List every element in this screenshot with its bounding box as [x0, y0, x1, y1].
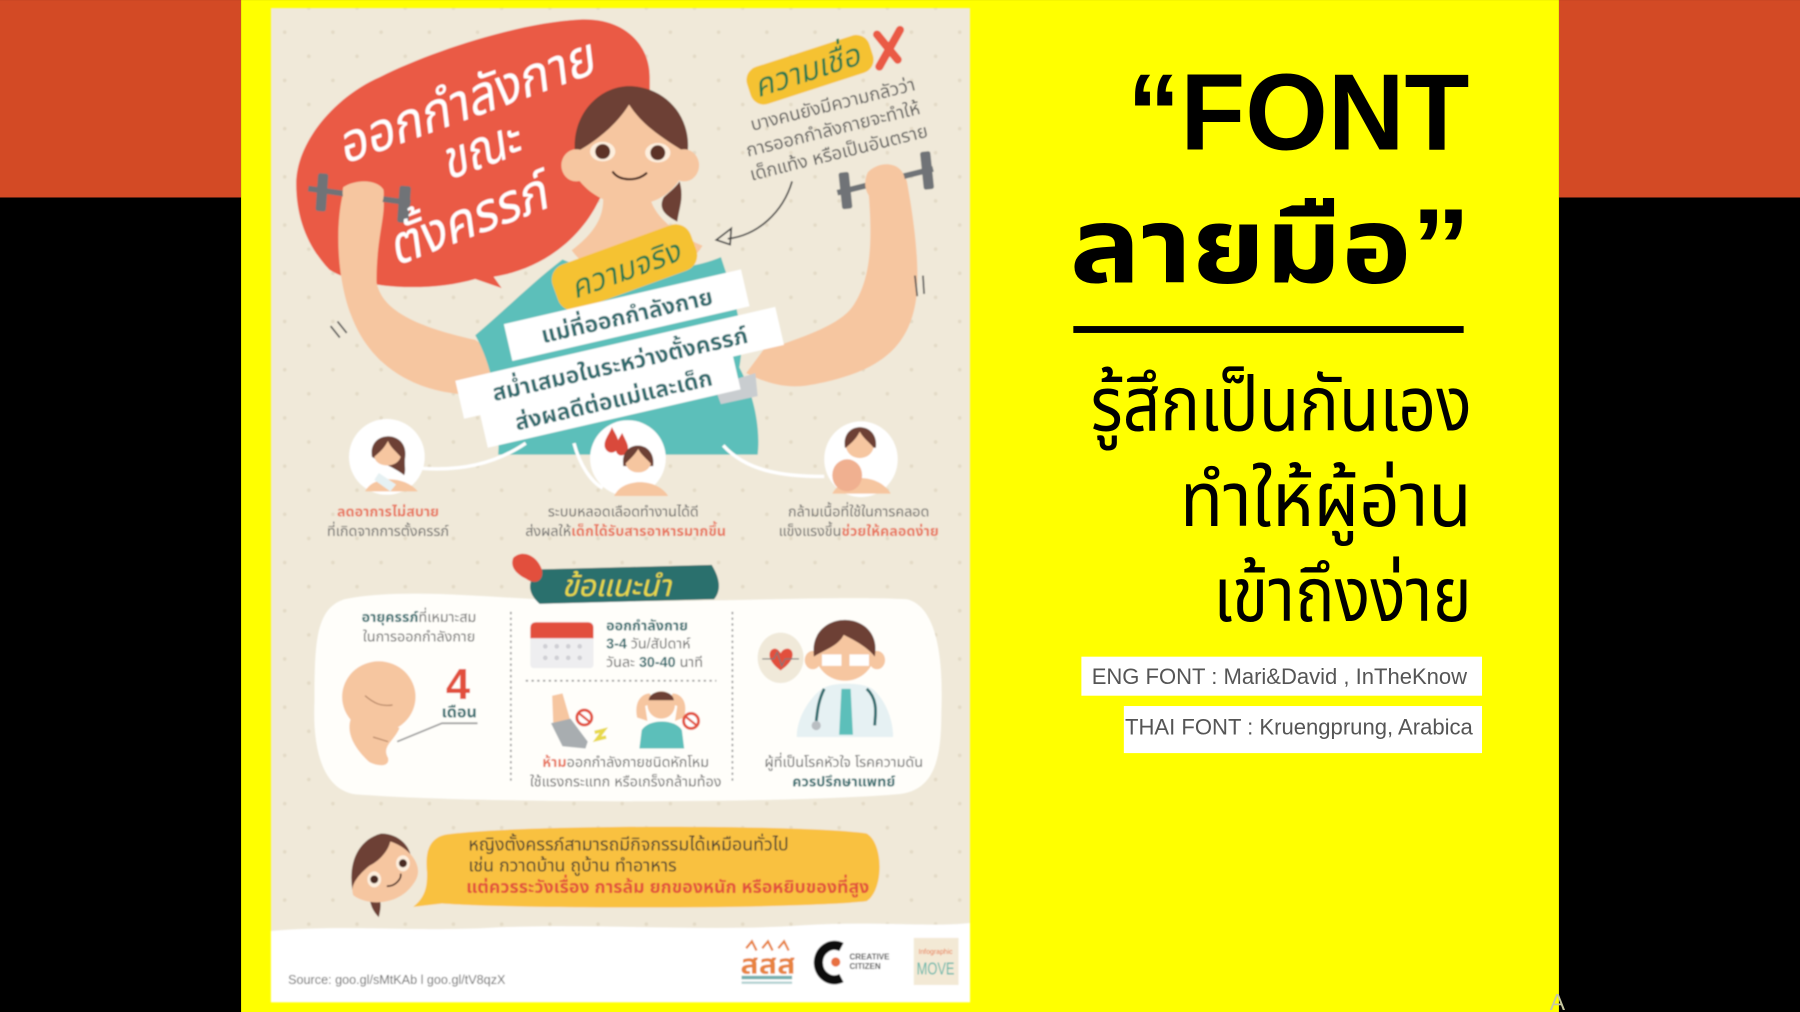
- myth text: บางคนยังมีความกลัวว่า: [748, 74, 917, 135]
- logo: creative citizen: [818, 945, 890, 980]
- doctor text: [764, 752, 923, 790]
- advice panel: [314, 594, 942, 801]
- poster background: [271, 8, 970, 1002]
- left dumbbell: [308, 173, 411, 223]
- benefit caption 3: [779, 502, 939, 540]
- subheading text: รู้สึกเป็นกันเอง: [1091, 363, 1472, 451]
- callout: 4 months: 4: [446, 661, 471, 709]
- icon: fetus: [342, 661, 416, 765]
- english font note: ENG FONT : Mari&David , InTheKnow: [1092, 664, 1467, 689]
- title speech bubble: [296, 19, 650, 288]
- logo: infographic move: [914, 938, 959, 985]
- logo: sss: [740, 941, 796, 984]
- heading: FONT: “FONT: [1127, 51, 1469, 173]
- right fist: [865, 164, 905, 205]
- frequency text: ออกกำลังกาย: [606, 618, 688, 634]
- ponytail: [662, 181, 682, 222]
- callout: 4 months: [397, 661, 478, 742]
- advice banner: ข้อแนะนำ: [562, 570, 673, 603]
- red band left: [0, 0, 241, 197]
- gestational age text: ในการออกกำลังกาย: [363, 630, 475, 646]
- thai font note: [1124, 706, 1482, 753]
- bubble text: [466, 834, 869, 898]
- ribbon 1: แม่ที่ออกกำลังกาย: [538, 280, 715, 348]
- icon: heart bubble: [758, 633, 804, 683]
- logo: sss: สสส: [740, 949, 796, 980]
- heading: Thai title: ลายมือ”: [1070, 187, 1471, 305]
- neck: [572, 193, 703, 277]
- icon: pin: [512, 554, 542, 582]
- advice banner: [512, 554, 719, 604]
- myth text: การออกกำลังกายจะทำให้: [744, 97, 922, 161]
- no exercise text: ใช้แรงกระแทก หรือเกร็งกล้ามท้อง: [530, 774, 721, 790]
- title text: ขณะ: [432, 107, 531, 192]
- icon: red X: [877, 30, 900, 67]
- yellow speech bubble: [413, 827, 880, 908]
- bubble text: หญิงตั้งครรภ์สามารถมีกิจกรรมได้เหมือนทั่วไป: [468, 834, 789, 855]
- logo: infographic move: MOVE: [917, 959, 955, 979]
- logo: creative citizen: CREATIVE: [849, 953, 890, 962]
- icon: doctor: [797, 620, 893, 737]
- motion marks: [331, 276, 924, 338]
- woman face: [351, 833, 418, 917]
- benefit caption 3: แข็งแรงขึ้นช่วยให้คลอดง่าย: [779, 521, 939, 540]
- logo: creative citizen: CITIZEN: [849, 962, 881, 971]
- divider: [1073, 326, 1464, 333]
- title text: ออกกำลังกาย: [328, 27, 605, 176]
- frequency text: 3-4 วัน/สัปดาห์: [606, 637, 691, 653]
- benefit caption 3: กล้ามเนื้อที่ใช้ในการคลอด: [788, 502, 929, 521]
- arrow: myth to fact: [716, 181, 792, 245]
- logo: infographic move: Infographic: [919, 949, 953, 956]
- benefit caption 2: ระบบหลอดเลือดทำงานได้ดี: [548, 505, 699, 521]
- dotted dividers: [511, 612, 732, 784]
- fact label: ความจริง: [566, 233, 686, 305]
- no exercise text: ห้ามออกกำลังกายชนิดหักโหม: [542, 755, 709, 771]
- yellow panel: [241, 0, 1559, 1012]
- shirt: [475, 257, 758, 455]
- bubble text: เช่น กวาดบ้าน ถูบ้าน ทำอาหาร: [468, 855, 677, 877]
- subheading text: เข้าถึงง่าย: [1213, 553, 1472, 638]
- ribbon 1: [504, 269, 749, 361]
- subheading text: [1091, 363, 1472, 638]
- ears: [561, 149, 591, 181]
- benefit caption 2: ส่งผลให้เด็กได้รับสารอาหารมากขึ้น: [525, 521, 726, 540]
- ribbon fold: [714, 373, 758, 404]
- thai font note: THAI FONT : Kruengprung, Arabica: [1125, 715, 1474, 740]
- benefit caption 1: [327, 504, 449, 540]
- myth text: เด็กแท้ง หรือเป็นอันตราย: [748, 120, 930, 185]
- right arm: [746, 167, 917, 386]
- bubble text: แต่ควรระวังเรื่อง การล้ม ยกของหนัก หรือหยิบของที่สูง: [466, 874, 869, 898]
- no exercise text: [530, 755, 721, 790]
- myth label: ความเชื่อ: [748, 33, 865, 104]
- frequency text: [606, 618, 703, 671]
- figure: arms: [338, 167, 917, 395]
- smile: [613, 172, 646, 179]
- icon: woman with no sign: [636, 691, 699, 749]
- source: Source: goo.gl/sMtKAb l goo.gl/tV8qzX: [288, 973, 506, 987]
- title text: ตั้งครรภ์: [377, 156, 563, 278]
- doctor text: ผู้ที่เป็นโรคหัวใจ โรคความดัน: [764, 752, 923, 771]
- ribbon 2: สม่ำเสมอในระหว่างตั้งครรภ์: [489, 319, 750, 406]
- left eye: [590, 142, 615, 161]
- title text: [328, 27, 605, 278]
- right eye: [645, 143, 670, 162]
- connector lines: [422, 443, 824, 488]
- benefit icon 3: [824, 421, 898, 497]
- benefit caption 2: [525, 505, 726, 540]
- ribbon 3: ส่งผลดีต่อแม่และเด็ก: [512, 365, 715, 435]
- icon: calendar: [530, 622, 593, 668]
- face skin: [577, 105, 684, 205]
- doctor text: ควรปรึกษาแพทย์: [792, 774, 895, 790]
- myth text: [736, 73, 930, 185]
- hair: [575, 86, 688, 154]
- face: [561, 86, 699, 222]
- benefit caption 1: ที่เกิดจากการตั้งครรภ์: [327, 521, 449, 540]
- gestational age text: [362, 607, 476, 646]
- english font note: [1081, 657, 1482, 696]
- right dumbbell: [837, 151, 934, 209]
- ribbon 3: [479, 352, 741, 448]
- benefit icon 1: [349, 419, 425, 495]
- subheading text: ทำให้ผู้อ่าน: [1180, 458, 1472, 546]
- benefit icon 2: [590, 420, 668, 496]
- benefit caption 1: ลดอาการไม่สบาย: [337, 504, 439, 521]
- left arm: [338, 185, 517, 395]
- frequency text: วันละ 30-40 นาที: [606, 655, 703, 671]
- panel: poster: [271, 8, 970, 1002]
- callout: 4 months: เดือน: [441, 704, 477, 722]
- gestational age text: อายุครรภ์ที่เหมาะสม: [362, 607, 476, 626]
- red band right: [1559, 0, 1800, 197]
- left fist: [343, 181, 384, 218]
- fact label: [547, 220, 702, 315]
- icon: shoe with no sign: [551, 693, 606, 749]
- footer: [271, 923, 970, 1002]
- ribbon 2: [455, 307, 784, 419]
